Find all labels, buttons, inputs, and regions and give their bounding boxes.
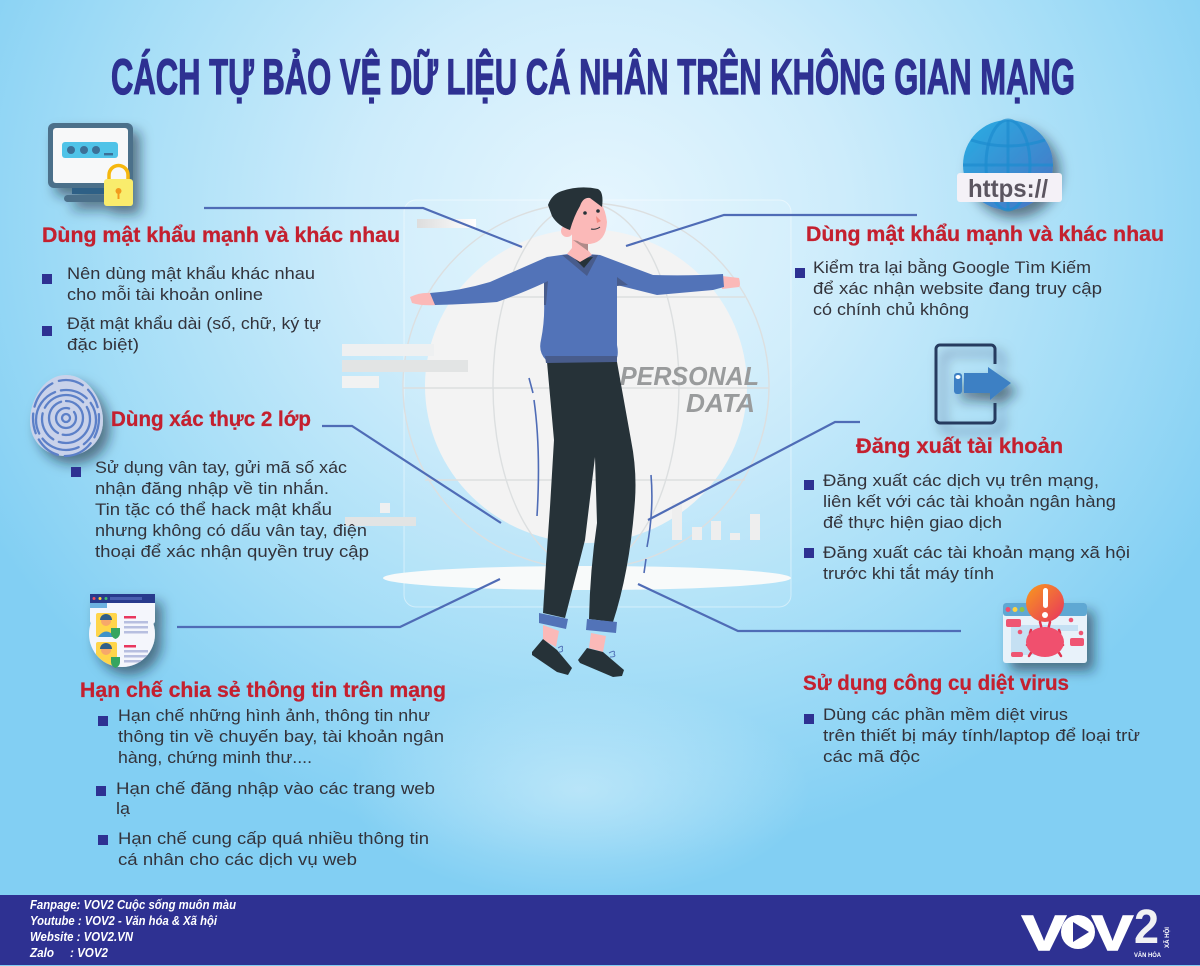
- bullet list: trên thiết bị máy tính/laptop để loại trừ: [823, 726, 1140, 745]
- bullet list: thoại để xác nhận quyền truy cập: [95, 542, 369, 561]
- icon: virus alert window: [1003, 584, 1087, 663]
- icon: profile cards: [89, 594, 155, 668]
- bullet list: [96, 706, 444, 869]
- bullet list: trước khi tắt máy tính: [823, 564, 994, 583]
- bullet list: [42, 264, 321, 354]
- bullet list: thông tin về chuyến bay, tài khoản ngân: [118, 727, 444, 746]
- logo: VOV2: 2: [1134, 901, 1159, 954]
- icon: https globe: https://: [968, 175, 1048, 203]
- icon: fingerprint: [30, 375, 103, 456]
- bullet list: để xác nhận website đang truy cập: [813, 279, 1102, 298]
- heading: Dùng mật khẩu mạnh và khác nhau: [42, 224, 400, 247]
- bullet list: Tin tặc có thể hack mật khẩu: [95, 500, 332, 519]
- bullet list: Hạn chế những hình ảnh, thông tin như: [118, 706, 430, 725]
- bullet list: các mã độc: [823, 747, 921, 766]
- bullet list: Kiểm tra lại bằng Google Tìm Kiếm: [813, 258, 1091, 277]
- panel: two-factor authentication: [30, 375, 369, 561]
- connector lines: [177, 208, 961, 631]
- bullet list: đặc biệt): [67, 335, 139, 354]
- footer contact text: Zalo: [29, 946, 54, 960]
- heading: Dùng xác thực 2 lớp: [111, 408, 311, 431]
- logo: VOV2: [1022, 901, 1171, 961]
- footer contact text: [29, 898, 236, 960]
- panel: antivirus: [803, 584, 1140, 766]
- bullet list: cho mỗi tài khoản online: [67, 285, 263, 304]
- panel: limit sharing: [80, 594, 446, 869]
- bullet list: để thực hiện giao dịch: [823, 513, 1002, 532]
- bullet list: lạ: [116, 799, 131, 818]
- bullet list: [804, 705, 1140, 766]
- bullet list: Sử dụng vân tay, gửi mã số xác: [95, 458, 348, 477]
- bullet list: [71, 458, 369, 561]
- panel: check website (right): [795, 120, 1164, 319]
- central background: globe and data panel: [342, 200, 791, 607]
- bullet list: cá nhân cho các dịch vụ web: [118, 850, 357, 869]
- bullet list: liên kết với các tài khoản ngân hàng: [823, 492, 1116, 511]
- bullet list: Hạn chế đăng nhập vào các trang web: [116, 779, 435, 798]
- bullet list: nhận đăng nhập về tin nhắn.: [95, 479, 329, 498]
- heading: Dùng mật khẩu mạnh và khác nhau: [806, 223, 1164, 246]
- logo: VOV2: V: [1092, 907, 1133, 961]
- bullet list: Đăng xuất các dịch vụ trên mạng,: [823, 471, 1099, 490]
- panel: strong password (left): [42, 123, 400, 354]
- bullet list: Dùng các phần mềm diệt virus: [823, 705, 1068, 724]
- logo: VOV2: V: [1022, 907, 1066, 961]
- icon: exit door: [936, 345, 1011, 423]
- heading: Đăng xuất tài khoản: [856, 435, 1063, 458]
- bullet list: [804, 471, 1130, 583]
- footer contact text: Website : VOV2.VN: [30, 930, 134, 944]
- heading: Hạn chế chia sẻ thông tin trên mạng: [80, 679, 446, 702]
- icon: https globe: [957, 120, 1062, 210]
- bullet list: [795, 258, 1102, 319]
- logo: VOV2: VĂN HÓA: [1134, 951, 1162, 959]
- footer contact text: Fanpage: VOV2 Cuộc sống muôn màu: [30, 898, 236, 912]
- bullet list: Hạn chế cung cấp quá nhiều thông tin: [118, 829, 429, 848]
- bullet list: hàng, chứng minh thư....: [118, 748, 312, 767]
- label: personal data: DATA: [686, 388, 755, 418]
- footer contact text: Youtube : VOV2 - Văn hóa & Xã hội: [30, 914, 217, 928]
- logo: VOV2: XÃ HỘI: [1163, 927, 1171, 948]
- bullet list: Đăng xuất các tài khoản mạng xã hội: [823, 543, 1130, 562]
- panel: log out: [804, 345, 1130, 583]
- bullet list: nhưng không có dấu vân tay, điện: [95, 521, 367, 540]
- footer contact text: : VOV2: [70, 946, 108, 960]
- bullet list: Đặt mật khẩu dài (số, chữ, ký tự: [67, 314, 321, 333]
- heading: Sử dụng công cụ diệt virus: [803, 672, 1069, 695]
- bullet list: có chính chủ không: [813, 300, 969, 319]
- label: personal data: [620, 361, 759, 418]
- bullet list: Nên dùng mật khẩu khác nhau: [67, 264, 315, 283]
- icon: monitor with lock: [48, 123, 133, 206]
- label: personal data: PERSONAL: [620, 361, 759, 391]
- footer bar: [0, 895, 1200, 965]
- illustration: person: [410, 187, 740, 677]
